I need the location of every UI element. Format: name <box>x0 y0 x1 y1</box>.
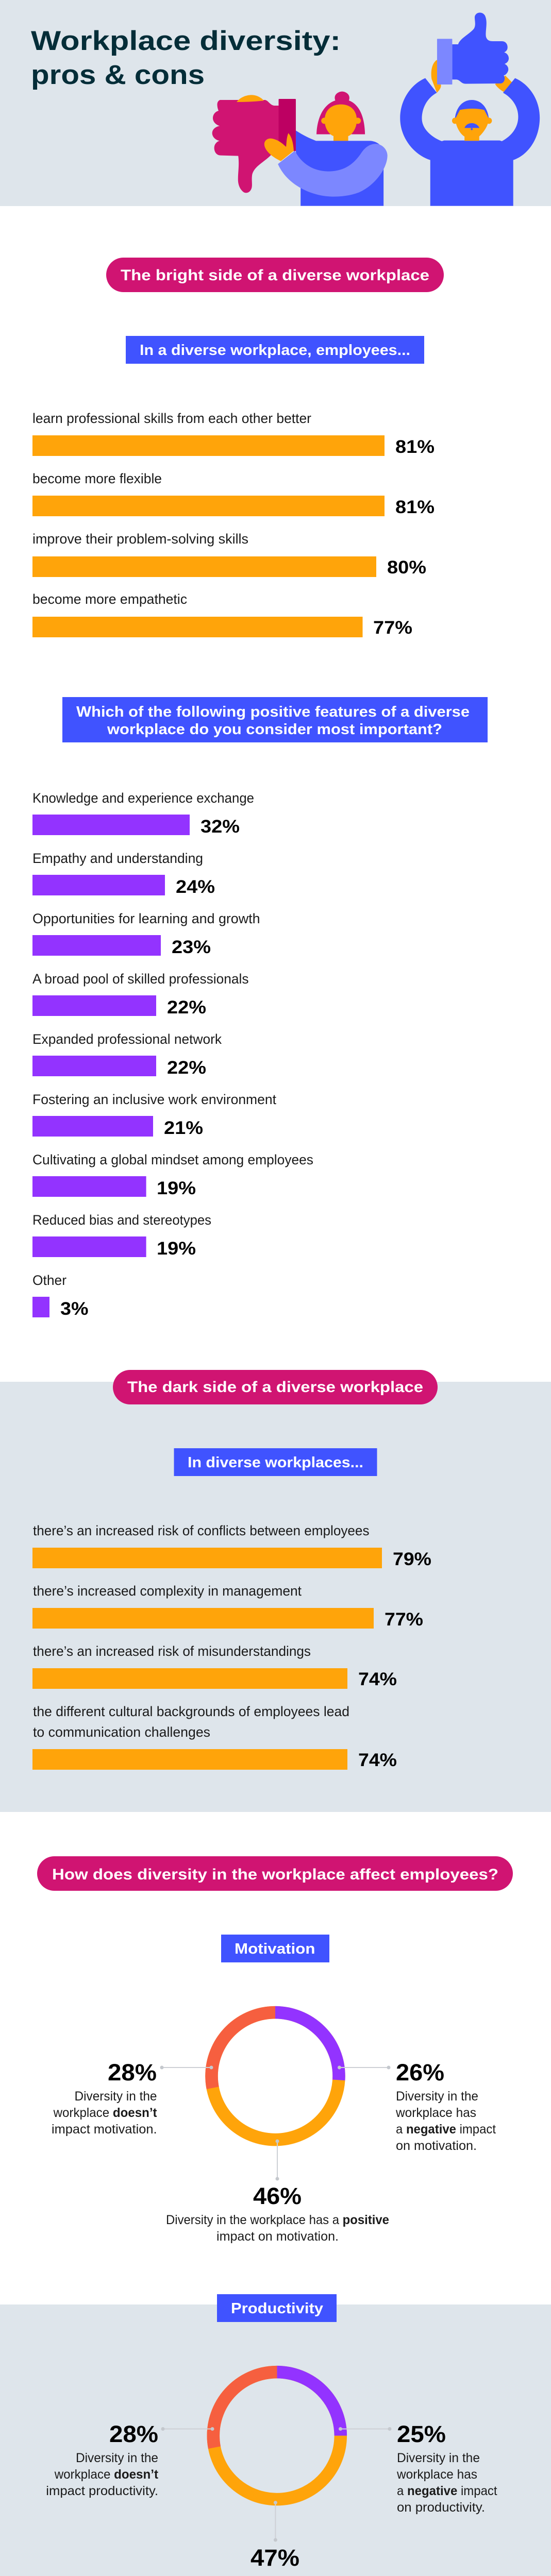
illustration: man holding a thumbs-up <box>400 12 540 206</box>
illustration: woman holding a thumbs-down <box>212 92 388 206</box>
donut chart: productivity <box>213 2372 341 2499</box>
panel: header <box>0 0 551 206</box>
subheading: positive features question <box>62 697 488 742</box>
bar row: communication challenges: the different cultural backgrounds of employees lead <box>33 1704 349 1719</box>
callout: doesn't impact 28%: 28% <box>108 2059 157 2086</box>
bar row: complexity: there’s increased complexity in management <box>33 1583 302 1599</box>
callout: negative 26%: workplace has <box>395 2106 476 2120</box>
subheading: motivation: Motivation <box>235 1941 315 1957</box>
leader lines: productivity <box>161 2427 392 2542</box>
bar row: other: Other <box>32 1273 66 1288</box>
bar row: global mindset: Cultivating a global mindset among employees <box>32 1152 313 1167</box>
callout: negative 26%: on motivation. <box>396 2139 477 2153</box>
callout: positive 46%: 46% <box>253 2183 302 2209</box>
subheading: in diverse workplaces <box>174 1448 377 1476</box>
callout: doesn't impact 28% <box>52 2059 157 2137</box>
bar row: knowledge exchange <box>32 790 254 837</box>
bar row: conflicts: there’s an increased risk of conflicts between employees <box>33 1523 369 1538</box>
callout: doesn't impact 28%: Diversity in the <box>76 2451 158 2465</box>
callout: doesn't impact 28% <box>46 2421 159 2498</box>
bar row: empathetic: 77% <box>373 618 412 638</box>
bar row: communication challenges <box>32 1704 397 1770</box>
heading: dark side: The dark side of a diverse workplace <box>127 1379 423 1396</box>
bar row: opportunities <box>32 911 260 957</box>
panel: motivation <box>52 1935 496 2244</box>
subheading: productivity <box>217 2294 337 2322</box>
subheading: in a diverse workplace: In a diverse workplace, employees... <box>140 342 410 359</box>
heading: bright side <box>106 258 444 292</box>
callout: negative 26%: 26% <box>396 2059 444 2086</box>
callout: negative 25%: workplace has <box>396 2467 477 2482</box>
heading: how does diversity affect employees <box>37 1856 513 1891</box>
bar row: opportunities: 23% <box>172 937 211 957</box>
bar row: empathy <box>32 851 215 897</box>
bar row: inclusive environment <box>32 1092 277 1138</box>
panel: dark side <box>0 1370 551 1812</box>
bar chart: employees benefits <box>32 411 435 638</box>
subheading: in a diverse workplace <box>126 336 424 364</box>
bar row: expanded network <box>32 1031 222 1078</box>
bar row: global mindset: 19% <box>157 1178 196 1198</box>
bar row: misunderstandings: 74% <box>358 1669 397 1689</box>
callout: doesn't impact 28%: impact productivity. <box>46 2484 158 2498</box>
title: pros & cons <box>31 60 205 90</box>
panel: productivity <box>0 2294 551 2576</box>
bar chart: positive features <box>32 790 313 1319</box>
callout: negative 25%: a negative impact <box>397 2484 497 2498</box>
bar row: misunderstandings <box>32 1643 397 1689</box>
heading: dark side <box>113 1370 438 1404</box>
bar row: global mindset <box>32 1152 313 1198</box>
bar row: learn professional skills <box>32 411 435 457</box>
donut chart: motivation <box>211 2012 339 2140</box>
subheading: motivation <box>221 1935 329 1962</box>
bar row: broad pool: 22% <box>167 997 206 1018</box>
bar row: inclusive environment: Fostering an inclusive work environment <box>32 1092 277 1107</box>
subheading: positive features question: Which of the following positive features of a diverse <box>76 704 470 720</box>
bar row: inclusive environment: 21% <box>164 1118 203 1138</box>
bar row: conflicts <box>32 1523 431 1569</box>
bar row: become more flexible: become more flexible <box>32 471 162 486</box>
bar row: reduced bias: 19% <box>157 1239 196 1259</box>
subheading: productivity: Productivity <box>231 2300 323 2317</box>
bar row: knowledge exchange: Knowledge and experience exchange <box>32 790 254 806</box>
bar row: problem-solving: improve their problem-solving skills <box>32 531 248 547</box>
callout: negative 26% <box>395 2059 496 2153</box>
callout: positive 47% <box>163 2545 387 2576</box>
callout: positive 46%: Diversity in the workplace has a positive <box>166 2213 389 2227</box>
title <box>31 26 341 90</box>
bar row: broad pool: A broad pool of skilled professionals <box>32 971 248 987</box>
bar row: conflicts: 79% <box>393 1549 431 1569</box>
bar row: problem-solving: 80% <box>387 557 426 578</box>
bar row: empathetic <box>32 591 412 638</box>
bar row: knowledge exchange: 32% <box>201 817 240 837</box>
bar row: problem-solving <box>32 531 426 578</box>
bar row: misunderstandings: there’s an increased risk of misunderstandings <box>33 1643 311 1659</box>
bar row: become more flexible: 81% <box>395 497 435 517</box>
callout: negative 26%: Diversity in the <box>396 2089 478 2104</box>
bar row: learn professional skills: learn professional skills from each other better <box>32 411 311 426</box>
bar row: opportunities: Opportunities for learning and growth <box>32 911 260 926</box>
bar row: learn professional skills: 81% <box>395 437 435 457</box>
bar row: complexity: 77% <box>385 1609 423 1630</box>
leader lines: motivation <box>160 2066 391 2180</box>
bar row: broad pool <box>32 971 248 1018</box>
bar row: complexity <box>32 1583 423 1630</box>
bar row: communication challenges: 74% <box>358 1750 397 1770</box>
callout: positive 47%: 47% <box>251 2545 299 2571</box>
callout: positive 46% <box>166 2183 389 2244</box>
callout: doesn't impact 28%: 28% <box>109 2421 158 2447</box>
callout: negative 25%: 25% <box>397 2421 446 2447</box>
bar row: reduced bias: Reduced bias and stereotypes <box>32 1212 211 1228</box>
bar row: become more flexible <box>32 471 435 517</box>
subheading: in diverse workplaces: In diverse workplaces... <box>188 1454 363 1471</box>
callout: negative 25%: on productivity. <box>397 2500 485 2515</box>
callout: doesn't impact 28%: Diversity in the <box>74 2089 157 2104</box>
bar row: communication challenges: to communication challenges <box>33 1724 210 1740</box>
callout: negative 25%: Diversity in the <box>397 2451 480 2465</box>
bar row: other <box>32 1273 89 1319</box>
callout: doesn't impact 28%: workplace doesn’t <box>53 2106 157 2120</box>
bar row: expanded network: Expanded professional network <box>32 1031 222 1047</box>
subheading: positive features question: workplace do you consider most important? <box>107 721 442 738</box>
title: Workplace diversity: <box>31 26 341 56</box>
bar row: empathy: Empathy and understanding <box>32 851 203 866</box>
bar row: expanded network: 22% <box>167 1058 206 1078</box>
bar row: empathy: 24% <box>176 877 215 897</box>
bar row: reduced bias <box>32 1212 211 1259</box>
callout: negative 25% <box>396 2421 497 2515</box>
bar row: empathetic: become more empathetic <box>32 591 187 607</box>
callout: doesn't impact 28%: impact motivation. <box>52 2122 157 2137</box>
callout: negative 26%: a negative impact <box>396 2122 496 2137</box>
callout: positive 46%: impact on motivation. <box>216 2229 339 2244</box>
heading: bright side: The bright side of a diverse workplace <box>121 267 429 284</box>
heading: how does diversity affect employees: How does diversity in the workplace affect employees? <box>52 1866 498 1883</box>
bar row: other: 3% <box>60 1299 89 1319</box>
callout: doesn't impact 28%: workplace doesn’t <box>54 2467 159 2482</box>
